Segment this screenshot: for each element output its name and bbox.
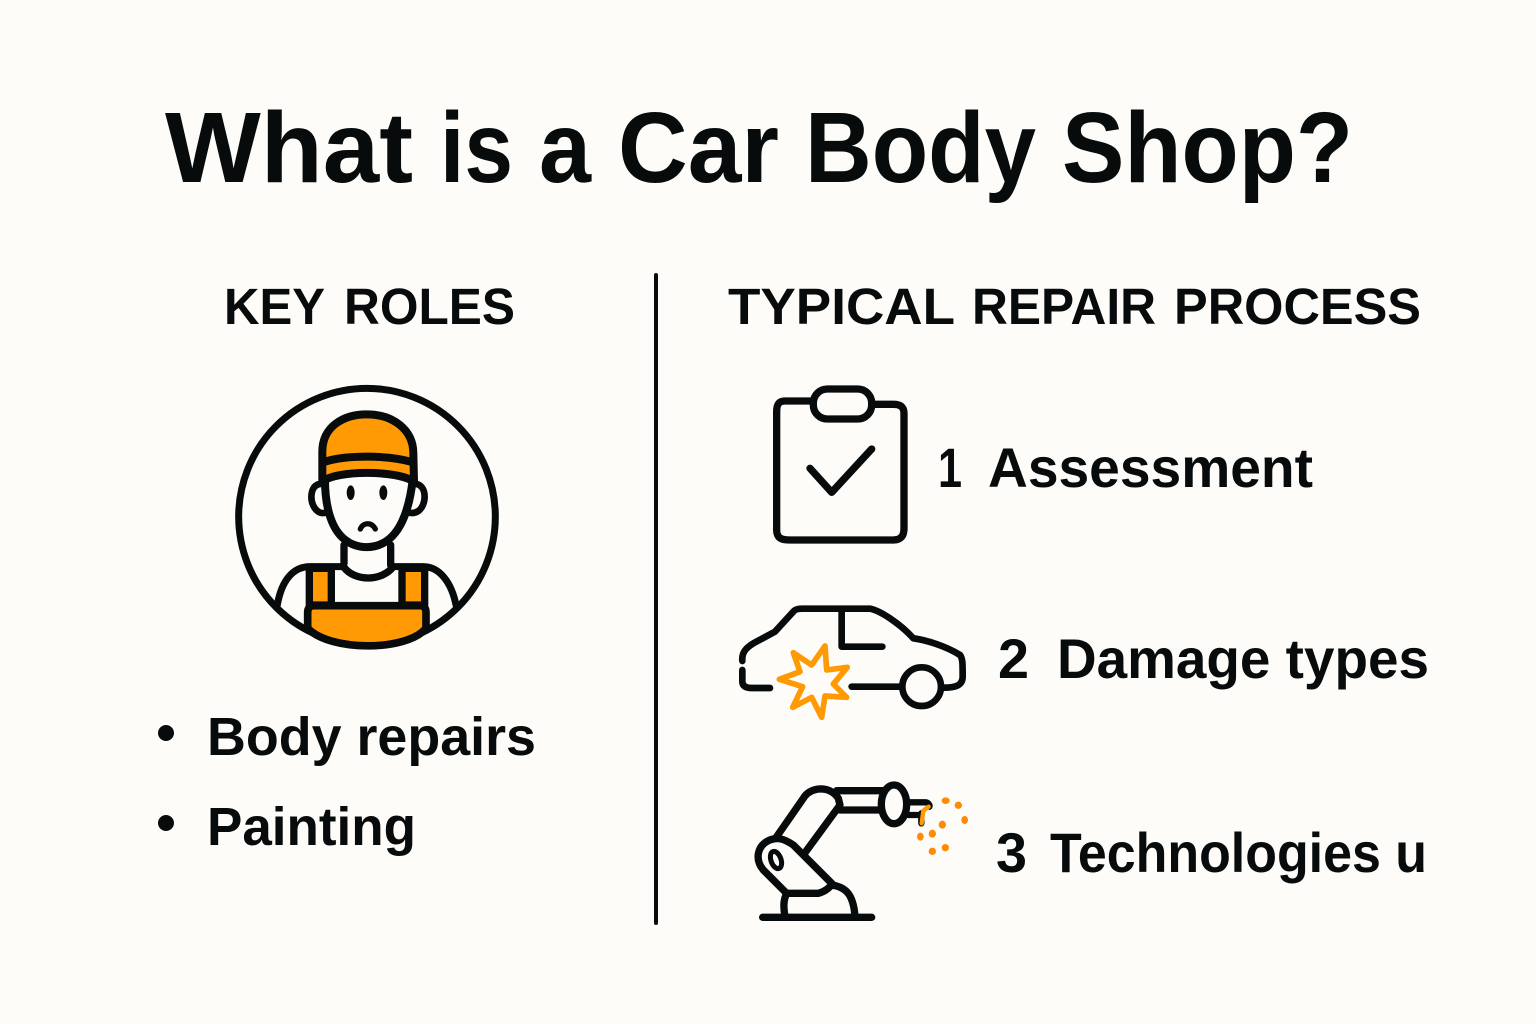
step 2: damage types: Damage types: [1057, 627, 1429, 690]
title: [165, 92, 1353, 204]
step 3: technologies: Technologies u: [1050, 821, 1427, 884]
title: a: [539, 92, 592, 204]
heading: typical repair process: TYPICAL: [728, 278, 955, 335]
bullet: body repairs: Body repairs: [207, 707, 536, 767]
worker overalls: [277, 545, 456, 646]
heading: typical repair process: [728, 278, 1421, 335]
icon: robot arm spraying: [758, 785, 968, 917]
impact star: [779, 646, 847, 717]
title: What: [165, 92, 413, 204]
heading: key roles: [224, 278, 515, 335]
heading: typical repair process: PROCESS: [1174, 278, 1421, 335]
title: is: [440, 92, 513, 204]
bullet: painting: Painting: [207, 797, 416, 857]
step 1: assessment: 1: [938, 436, 962, 499]
step 2: damage types: 2: [998, 627, 1029, 690]
heading: key roles: ROLES: [344, 278, 515, 335]
icon: damaged car: [742, 609, 963, 717]
worker cap: [322, 414, 414, 482]
step 3: technologies: 3: [996, 821, 1027, 884]
bullet list: key roles: [158, 707, 536, 857]
icon: worker in circle: [239, 388, 495, 646]
heading: typical repair process: REPAIR: [972, 278, 1156, 335]
title: Body: [805, 92, 1036, 204]
spray nozzle and paint dots: [917, 797, 968, 855]
icon: clipboard with check: [777, 389, 904, 540]
title: Car: [618, 92, 779, 204]
title: Shop?: [1062, 92, 1353, 204]
worker face: [311, 480, 425, 547]
step 1: assessment: Assessment: [988, 436, 1313, 499]
heading: key roles: KEY: [224, 278, 325, 335]
